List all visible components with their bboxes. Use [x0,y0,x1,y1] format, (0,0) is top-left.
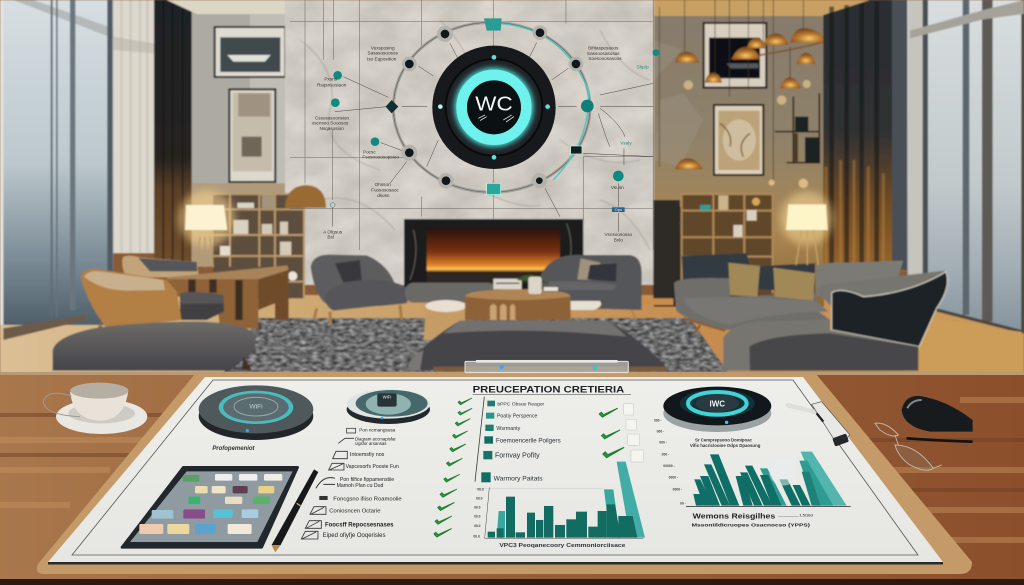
picture: right abstract [713,104,764,176]
fireplace [404,219,583,289]
checklist text: Foocsff Repocsesnases [325,522,394,528]
bar chart: left: 00.0 [476,496,483,500]
bar chart: right: 0000 - [669,475,678,479]
rug [224,318,728,372]
teal label markers [330,49,659,212]
left window [0,0,113,340]
bar chart: right: 000 - [659,441,667,445]
center ottoman [407,321,667,372]
criteria list: Wsrmanty [496,426,521,432]
right ottoman [723,319,918,371]
right half of the sheet [473,385,851,549]
wall labels: Bifitaspesaoos [588,46,619,51]
right wall and ceiling [654,0,870,307]
right floor [905,315,1022,372]
orbit nodes [386,18,594,195]
hub device: WC [475,93,513,116]
checklist text: Eiped ofiyfje Ooqerisles [323,533,386,539]
bar chart: left: 00.0 [474,515,481,519]
floor [0,295,1024,373]
picture: upper left [214,26,286,78]
checklist text: Ugsfor arsansas [355,441,386,446]
bench and center sofa [405,255,642,320]
wall labels: Shp/p [637,64,649,69]
caption: left chart: VPC3 Peoqanecoory Cemmoniorciisace [499,543,625,549]
picture: poster [228,88,276,183]
criteria list [475,397,561,483]
bar chart: right: 000 - [662,452,669,456]
wood desk [0,372,1024,585]
criteria list: Warmory Paitats [494,476,543,483]
desk mouse [902,396,973,442]
wall labels: Ohsson [375,182,391,187]
checklist text: Diagram accmapisfar [355,437,396,442]
coffee cup and saucer [43,383,147,434]
wall labels: Soesooosasoos [588,56,622,61]
wall labels: Vsaly [620,140,632,145]
checklist text: Pon filfice fippamenstiie [340,477,394,483]
left sheer curtain [113,0,155,253]
marble wall with joints and veins [285,0,657,285]
caption: large puck: Profopemeniot [212,446,256,452]
right upper shelf [775,93,820,163]
wall labels: Vsnsoososso [604,232,633,237]
paper inner border [72,380,918,555]
picture: upper right [703,22,767,89]
pen [272,469,318,552]
left floor lamp [178,190,235,267]
checklist text: Foncgsno ifiiso Roamoolie [333,496,402,502]
device: dark puck: IWC [710,399,725,408]
dark armchair [817,271,948,347]
device: small puck [347,389,430,424]
criteria list: Poatiy Perspence [497,414,538,420]
wall labels: dsusn [377,193,390,198]
left ottoman [53,322,255,371]
checklist text: Vapcesorfs Pooste Fun [346,464,399,470]
wall labels: Ops [615,207,622,212]
room background [0,0,1024,373]
orbit ring [393,22,590,192]
rear grey chair [122,256,199,277]
checklist text: Mamoh Plan cu Dud [337,483,383,489]
clip [785,402,850,447]
wall labels: Vsusn [611,185,624,190]
copper dome lamp [285,185,326,208]
heading: PREUCEPATION CRETIERIA [473,385,625,395]
bar chart: left: 00.0 [474,524,481,528]
tablet [122,467,298,547]
device: large puck [199,385,313,440]
eyeglasses [875,423,942,470]
wall labels: Bsl [327,235,334,240]
caption: right device: Vifis hacriclooine Odps Dpaosung [690,443,761,448]
wall labels: Rsqsnsosiaon [317,83,347,88]
left dark curtain [154,0,192,263]
device: large puck: WiFi [249,404,263,411]
chart notes: Wemons Reisgilhes [693,511,775,520]
bar chart: right: 000 - [657,429,664,433]
right bookshelf [654,193,773,300]
bar chart: left: 00.0 [473,535,480,539]
chart notes: Mssoniildicruopes Osacnocso (YPPS) [692,522,810,528]
coffee tables [423,275,601,340]
hub device [432,46,556,169]
wall labels: Pxsns [324,77,338,82]
center left armchair [311,255,408,324]
wall grid lines [290,0,653,250]
bar chart: left: 00.0 [477,487,484,491]
criteria list: bPPC Obsue Reagor [497,402,544,408]
wall labels: Iso Eqposition [367,56,397,61]
green check column [434,398,472,537]
caption: right device [690,437,761,448]
wall labels: A Ofgsus [323,229,343,234]
wall labels: Nsqasosion [319,126,344,131]
criteria list: Foemoencerlle Poilgers [496,437,561,444]
wall labels: Sassoosasosas [587,51,620,56]
right window [907,0,1024,333]
wall labels [312,45,649,242]
paper sheet [48,377,943,562]
wall labels: Pocsc [363,149,376,154]
left wall and ceiling [167,0,292,267]
wall labels: Fuosososaoc [371,187,400,192]
side ticks and tabs [599,403,644,462]
right sectional sofa [674,253,903,333]
bar chart: right: 0000 - [673,488,682,492]
wall diagram: central WC hub [290,0,659,250]
clipboard shadow line [48,562,943,564]
wall labels: Vuxsposing [371,45,395,50]
clip on top of ottoman [465,360,628,373]
tan armchair [81,269,224,332]
criteria list: Fornvay Pofity [495,453,540,460]
wall labels: Cssosasoonsion [315,115,349,120]
bar chart: right: 00000 - [663,464,675,468]
checklist text [301,428,402,539]
bar chart: left: 00.0 [474,506,481,510]
right curtain [823,0,908,272]
bar chart: right [654,418,851,507]
left bookshelf [213,193,305,298]
checklist text: Intoemsfiy nos [350,452,385,458]
checklist text: Pon ncmangsusa [359,428,396,433]
bar chart: right: 000 - [654,418,662,422]
chart notes: 1.5/10d [799,513,813,518]
chart notes [692,511,813,528]
left wooden desk [167,265,289,328]
device: dark puck [663,387,771,432]
right dark alcove and shelf [643,200,680,305]
clipboard board [37,374,972,574]
wall labels: Sasasosoosos [368,51,398,56]
left half of the sheet [122,385,472,552]
wall labels: oscnsoo Sooosos [312,120,349,125]
right floor lamp [780,192,833,265]
caption: right device: Sr Cemprepsono Domipoac [695,437,753,442]
device: small puck: WiFi [383,395,391,400]
checklist text: Coniosncen Octarie [329,508,380,514]
pendant lamps [659,0,828,188]
bar chart: left [473,462,645,539]
connector lines [333,43,653,232]
wall labels: Fsosnooosopsioo [362,155,399,160]
bar chart: right: 00 - [680,502,686,506]
wall labels: Bxlo [614,237,623,242]
